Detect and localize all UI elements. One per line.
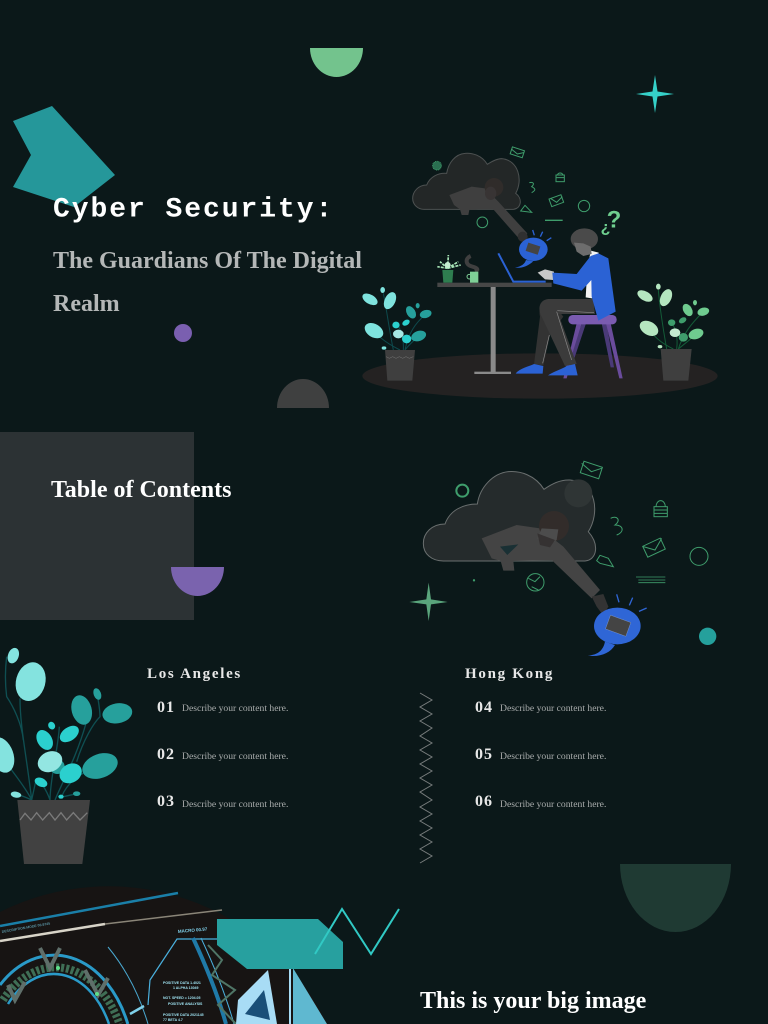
item 04: Describe your content here.	[500, 703, 606, 714]
cloud	[423, 472, 596, 561]
question marks: ?	[607, 206, 621, 233]
item 06	[475, 793, 606, 810]
speech bubble with envelope	[515, 230, 551, 268]
item 02	[157, 746, 288, 763]
stems	[2, 657, 100, 800]
ground shadow	[362, 353, 718, 399]
illustration: cloud hacker reaching bubble	[409, 461, 716, 656]
shape: purple half circle	[171, 567, 224, 596]
column: Hong Kong	[465, 666, 606, 810]
item 03: Describe your content here.	[182, 799, 288, 810]
item 04	[475, 699, 606, 716]
leaves	[0, 646, 134, 799]
image: futuristic HUD in circular crop	[0, 886, 327, 1024]
pot: left	[385, 350, 415, 381]
pot	[17, 800, 90, 864]
shape: cyan zigzag line	[315, 909, 399, 954]
desk	[437, 283, 552, 374]
plant: right green	[635, 284, 710, 349]
image: futuristic HUD in circular crop: 77 BETA 4.7	[163, 1018, 183, 1022]
cloud highlight	[564, 479, 592, 507]
coffee cup with steam	[467, 256, 478, 283]
item 05: 05	[475, 746, 493, 763]
shape: green half circle	[310, 48, 363, 77]
heading: Los Angeles: Los Angeles	[147, 666, 242, 682]
item 03: 03	[157, 793, 175, 810]
cloud hacker	[449, 178, 528, 242]
item 02: Describe your content here.	[182, 751, 288, 762]
pot: right	[661, 349, 692, 381]
line icons	[456, 461, 708, 591]
plant: left teal	[360, 287, 432, 350]
speech bubble with envelope	[588, 594, 647, 656]
shape: dark green half circle	[620, 864, 731, 932]
shape: teal banner	[217, 919, 343, 969]
icon: green sparkle	[409, 583, 448, 621]
heading: table of contents: Table of Contents	[51, 477, 231, 503]
item 01: 01	[157, 699, 175, 716]
heading: big image: This is your big image	[420, 988, 647, 1014]
item 05: Describe your content here.	[500, 751, 606, 762]
image: futuristic HUD in circular crop: DESCRIPTION MODE 00.9745	[1, 922, 50, 934]
item 06: Describe your content here.	[500, 799, 606, 810]
cloud	[413, 153, 520, 209]
image: futuristic HUD in circular crop: 1 ALPHA 13049	[173, 986, 198, 990]
column: Los Angeles	[147, 666, 288, 810]
image: futuristic HUD in circular crop: NOT. SPEED = 1204.05	[163, 996, 201, 1000]
subtitle: Realm	[53, 291, 120, 317]
item 04: 04	[475, 699, 493, 716]
illustration: person at desk with cloud hacker	[360, 147, 718, 399]
shape: teal arrow polygon	[13, 106, 115, 207]
image: futuristic HUD in circular crop: POSITIVE ANALYSIS	[168, 1002, 203, 1006]
shape: gray half circle	[277, 379, 329, 408]
illustration: large teal potted plant	[0, 646, 134, 864]
desk plant	[437, 255, 461, 283]
panel: table of contents header	[0, 432, 194, 620]
question marks: ¿	[601, 220, 610, 237]
stool	[563, 315, 623, 378]
jacket	[552, 253, 616, 321]
hacker	[482, 511, 608, 616]
image: futuristic HUD in circular crop: POSITIVE DATA 2021145	[163, 1013, 204, 1017]
subtitle	[53, 248, 362, 317]
hand	[538, 269, 554, 280]
shoes	[516, 364, 578, 376]
image: futuristic HUD in circular crop: POSITIVE DATA 1.4021	[163, 981, 201, 985]
item 01	[157, 699, 288, 716]
subtitle: The Guardians Of The Digital	[53, 248, 362, 274]
legs	[534, 299, 595, 366]
item 06: 06	[475, 793, 493, 810]
item 03	[157, 793, 288, 810]
heading: Hong Kong: Hong Kong	[465, 666, 554, 682]
shape: purple dot	[174, 324, 192, 342]
shape: teal dot	[699, 628, 716, 645]
item 05	[475, 746, 606, 763]
icon: cyan sparkle	[636, 75, 674, 113]
line icons	[433, 147, 590, 228]
head	[571, 228, 598, 256]
item 02: 02	[157, 746, 175, 763]
title: Cyber Security:	[53, 194, 334, 226]
image: futuristic HUD in circular crop: MACRO 00.97	[178, 926, 208, 934]
zigzag divider	[420, 693, 432, 863]
shirt	[586, 251, 599, 298]
question marks	[601, 206, 621, 237]
item 01: Describe your content here.	[182, 703, 288, 714]
laptop	[498, 253, 546, 282]
